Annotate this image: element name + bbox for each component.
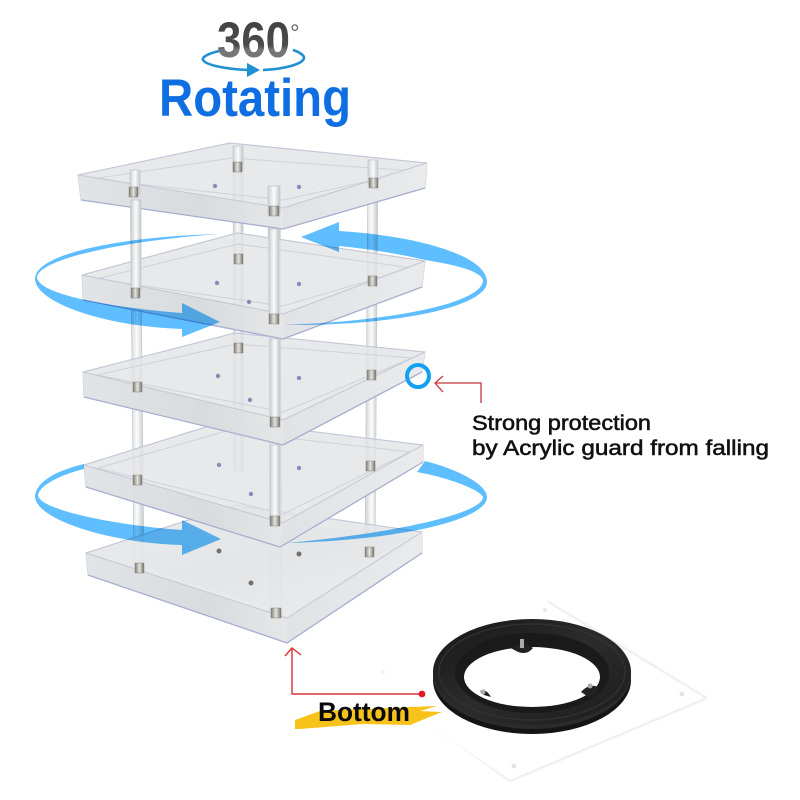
metal post brackets	[129, 162, 378, 618]
tray 4	[84, 421, 423, 547]
tray 3	[83, 333, 425, 445]
yellow brush stroke	[295, 706, 442, 729]
title: 360 degree rotating logo	[159, 12, 351, 128]
text: guard callout: Strong protection	[472, 412, 651, 435]
icon: guard highlight circle	[407, 365, 429, 387]
text: guard callout	[472, 412, 769, 460]
icon: rotation arc arrow	[203, 50, 304, 77]
heading: 360 degrees: 360	[217, 12, 290, 68]
arrow: lower ring left sweep	[35, 464, 221, 555]
rotation arrows: lower ring	[35, 461, 487, 555]
arrow: upper ring right sweep	[283, 222, 487, 325]
post tops	[130, 146, 378, 518]
panel: white base plate with bearing	[363, 602, 705, 780]
rotation arrows: upper ring	[35, 222, 487, 337]
tower of acrylic trays	[78, 143, 427, 643]
arrow: upper ring left sweep	[35, 234, 220, 337]
tray 2	[82, 233, 425, 339]
black rotating bearing ring	[433, 619, 631, 734]
label: Bottom on yellow brush stroke	[295, 697, 442, 729]
tray 5 (bottom)	[86, 505, 422, 643]
posts	[130, 146, 378, 616]
text: Bottom: Bottom	[318, 697, 410, 727]
arrow: lower ring right sweep	[287, 461, 487, 543]
heading: 360 degrees: °	[290, 20, 300, 47]
heading: Rotating: Rotating	[159, 69, 351, 128]
text: guard callout: by Acrylic guard from falling	[472, 437, 769, 460]
tray 1 (top)	[78, 143, 427, 229]
white plate	[363, 602, 705, 780]
arrow: red pointer to guard	[435, 376, 481, 403]
arrow: red pointer to tower bottom	[285, 648, 425, 697]
